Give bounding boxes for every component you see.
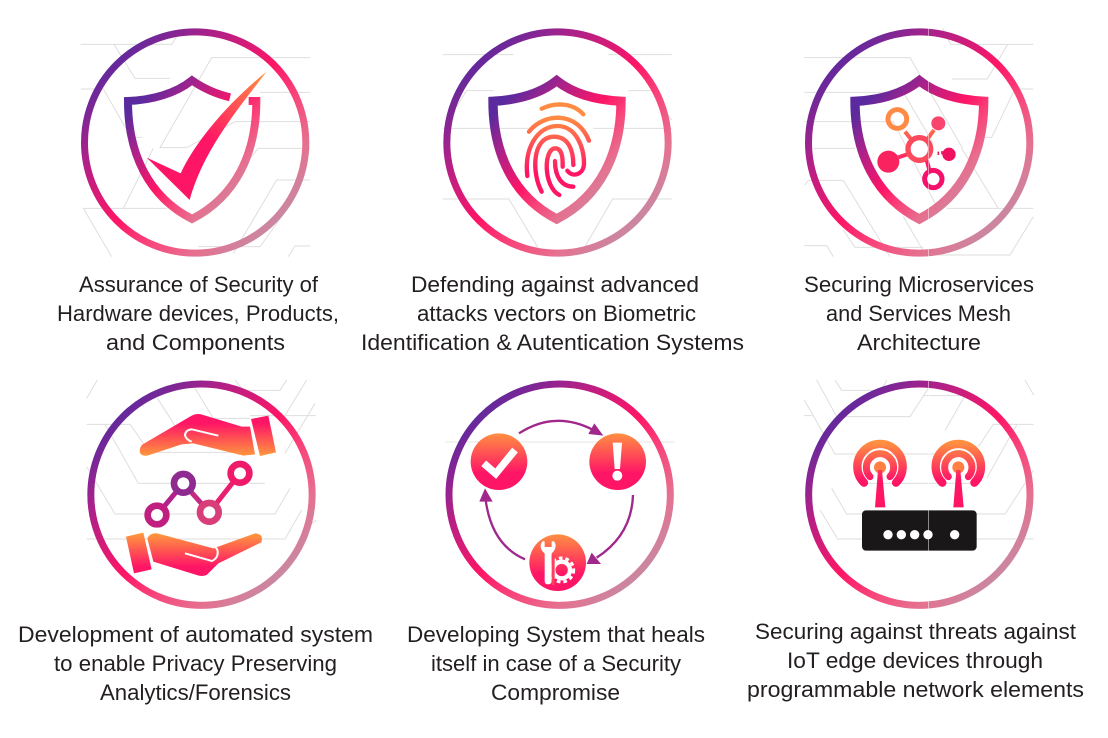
panel: microservices security xyxy=(804,28,1034,355)
panel: privacy preserving analytics xyxy=(18,380,373,705)
caption: programmable network elements xyxy=(747,677,1084,702)
caption xyxy=(361,272,744,355)
icon: check badge xyxy=(471,433,527,490)
shield outline xyxy=(855,81,984,219)
caption xyxy=(57,272,339,355)
panel: hardware security assurance xyxy=(57,32,339,355)
caption: and Components xyxy=(106,330,285,355)
caption: Identification & Autentication Systems xyxy=(361,330,744,355)
ring xyxy=(808,32,1030,253)
arrow: check to alert xyxy=(519,421,603,436)
icon: left antenna xyxy=(857,444,903,507)
caption: itself in case of a Security xyxy=(431,651,682,676)
ring xyxy=(449,384,670,605)
icon: right antenna xyxy=(936,444,981,507)
icon: service mesh xyxy=(877,110,956,188)
icon: repair badge xyxy=(529,534,586,591)
caption: Hardware devices, Products, xyxy=(57,301,339,326)
icon: router body xyxy=(862,510,977,551)
caption: to enable Privacy Preserving xyxy=(54,651,337,676)
icon: check mark xyxy=(147,72,267,200)
caption xyxy=(407,622,705,705)
icon: upper hand xyxy=(140,414,276,456)
panel: biometric defense xyxy=(361,32,744,355)
caption: and Services Mesh xyxy=(826,301,1011,326)
ring xyxy=(91,384,312,605)
caption: Compromise xyxy=(491,680,620,705)
caption: Assurance of Security of xyxy=(79,272,319,297)
caption xyxy=(747,619,1084,702)
caption xyxy=(18,622,373,705)
icon: line chart xyxy=(148,464,249,524)
caption: Securing Microservices xyxy=(804,272,1034,297)
caption: Architecture xyxy=(857,330,981,355)
shield outline xyxy=(128,80,256,219)
icon: lower hand xyxy=(126,533,262,576)
caption: Analytics/Forensics xyxy=(100,680,291,705)
icon: fingerprint xyxy=(527,104,589,195)
ring xyxy=(809,384,1030,605)
caption: Defending against advanced xyxy=(411,272,699,297)
caption: Development of automated system xyxy=(18,622,373,647)
caption: attacks vectors on Biometric xyxy=(417,301,696,326)
arrow: repair to check xyxy=(479,488,525,559)
caption: IoT edge devices through xyxy=(787,648,1043,673)
arrow: alert to repair xyxy=(587,495,633,564)
icon: alert badge xyxy=(589,433,646,490)
panel: self-healing system xyxy=(407,384,705,705)
ring xyxy=(84,32,306,253)
caption xyxy=(804,272,1034,355)
ring xyxy=(447,32,668,253)
shield outline xyxy=(493,81,621,219)
panel: IoT edge device security xyxy=(747,380,1084,702)
caption: Developing System that heals xyxy=(407,622,705,647)
caption: Securing against threats against xyxy=(755,619,1077,644)
